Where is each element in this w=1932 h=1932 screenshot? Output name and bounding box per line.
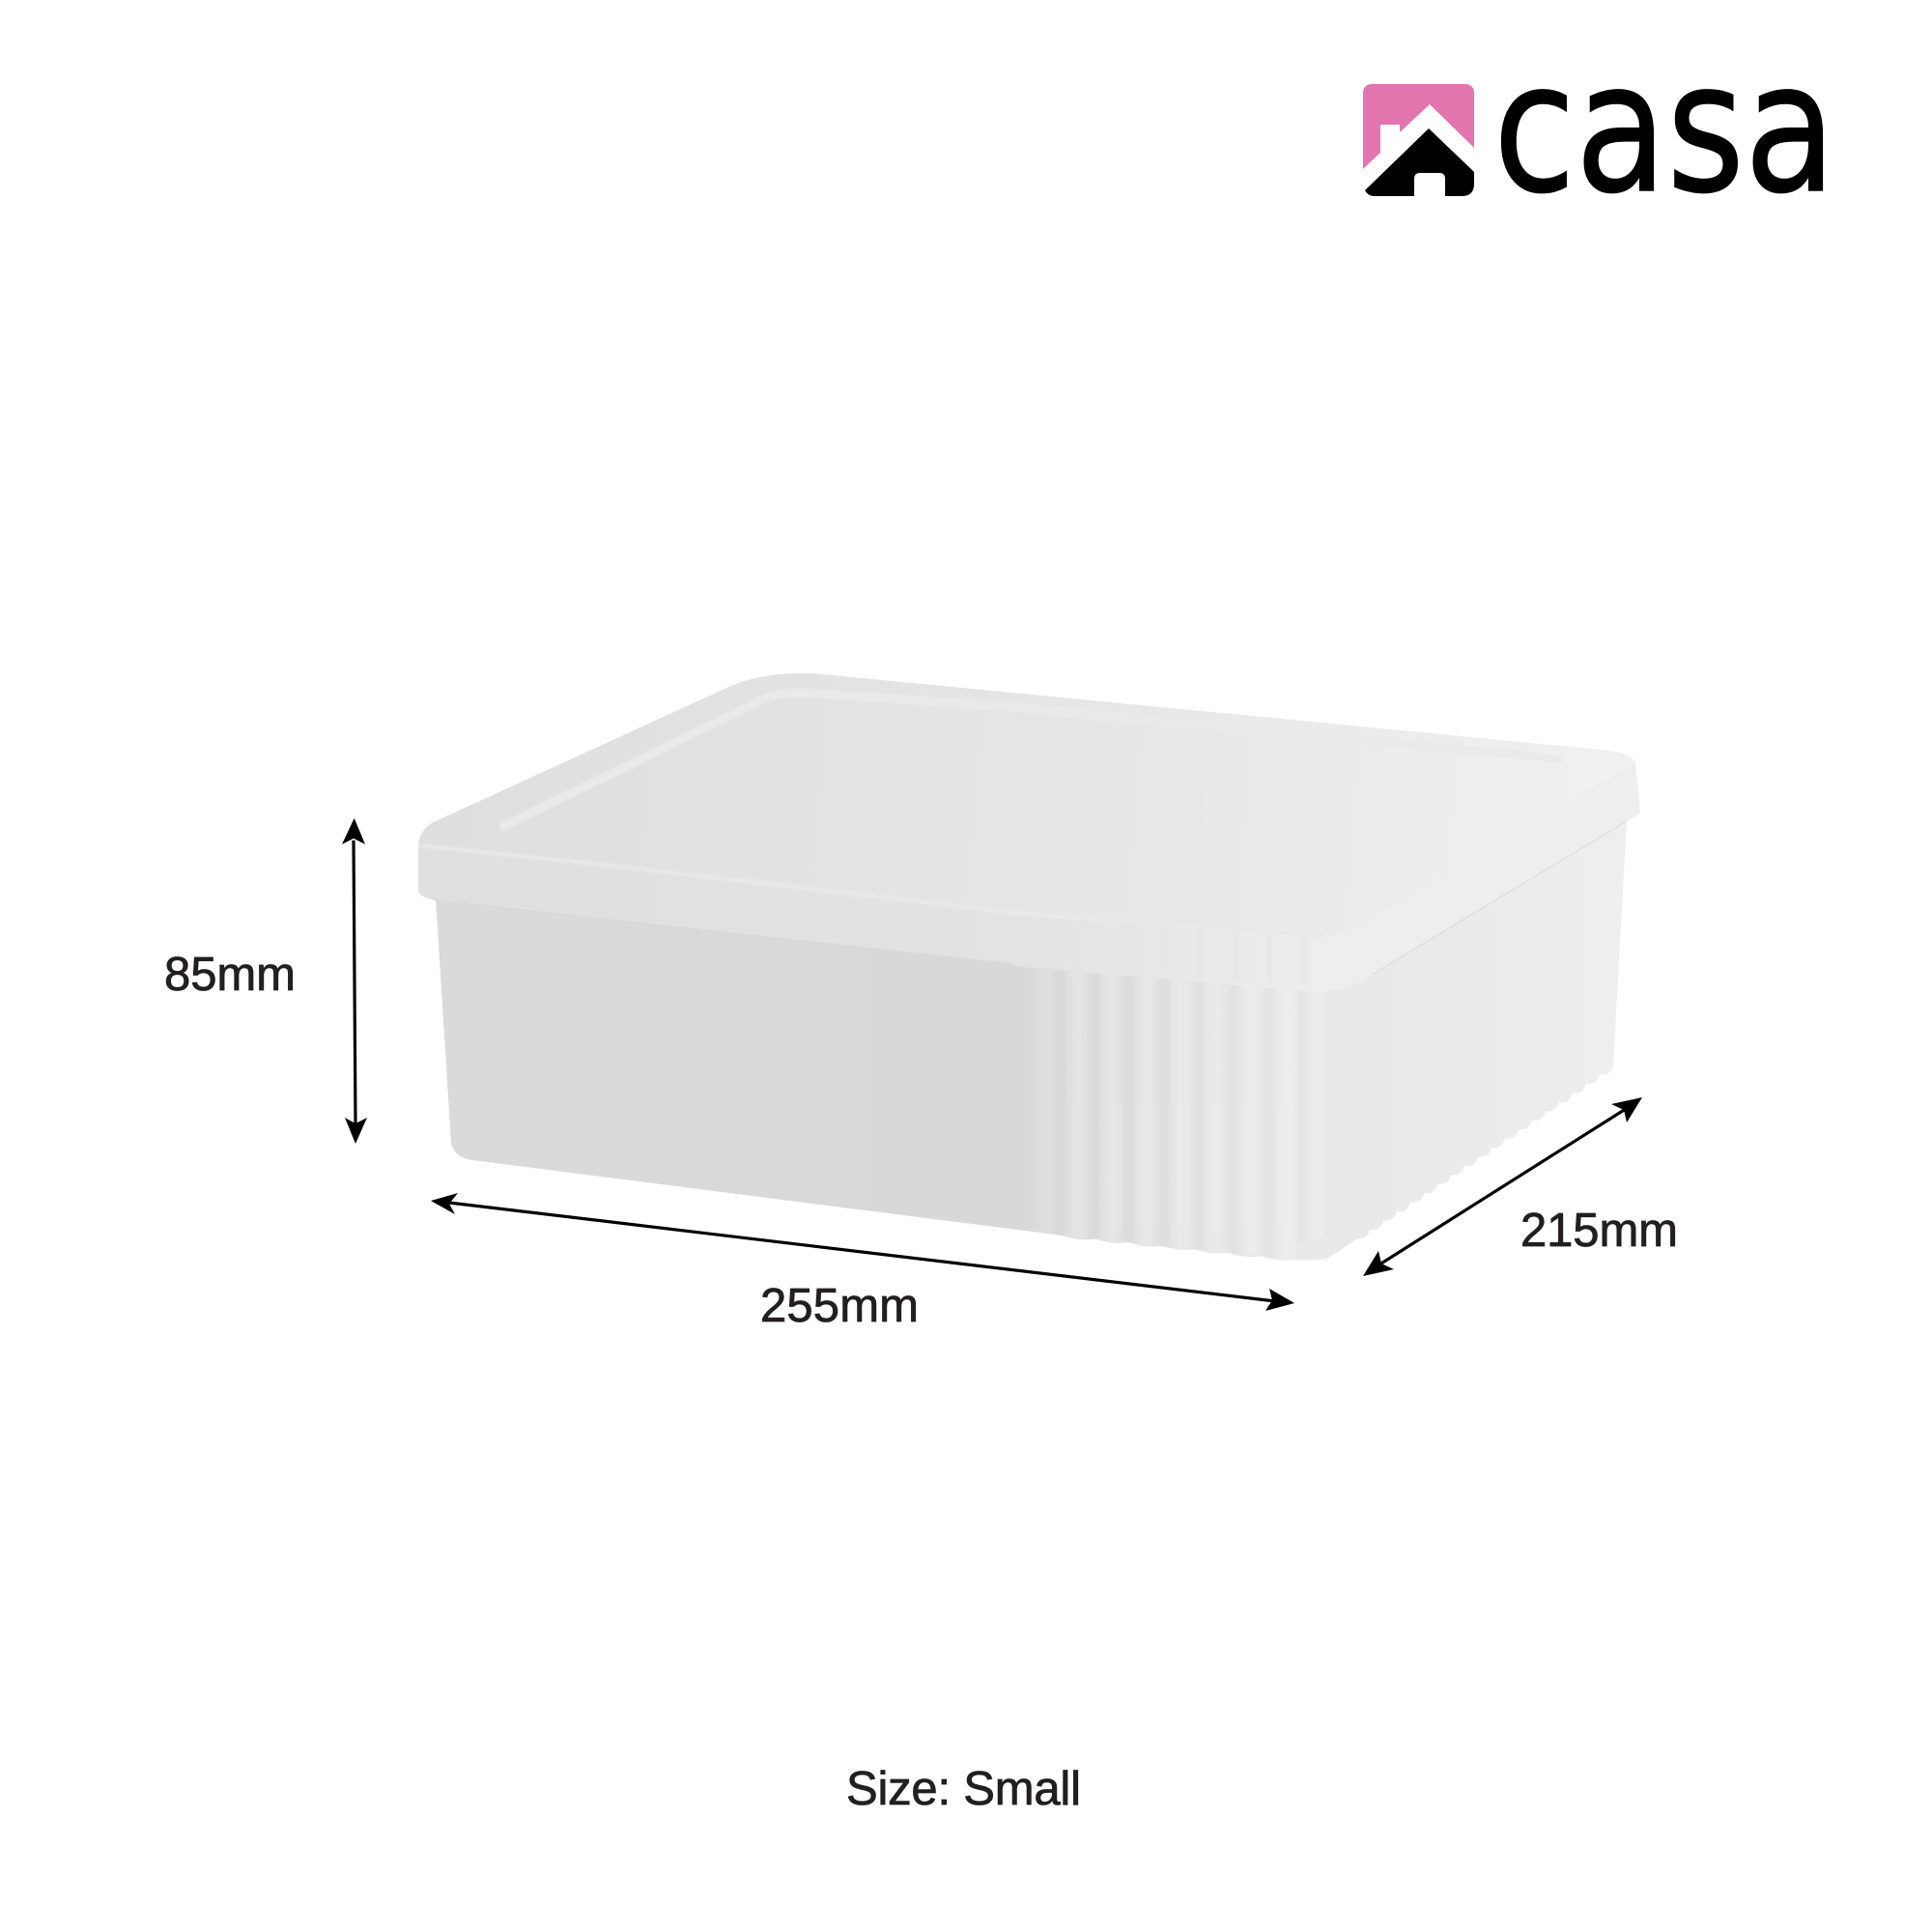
ribs on front wall [1055, 956, 1308, 1265]
arrow: depth [1363, 1097, 1642, 1276]
caption: size: Size: Small [846, 1763, 1081, 1815]
product: white storage box [418, 673, 1640, 1265]
lid top face [418, 673, 1635, 936]
icon: pink square with house [1363, 84, 1474, 196]
lid ribs [1058, 920, 1308, 986]
box body: front wall [436, 898, 1324, 1261]
wordmark: casa: casa [1493, 24, 1835, 234]
label: height: 85mm [164, 949, 296, 1001]
lid right band [1333, 763, 1640, 991]
lid front edge highlight [418, 845, 1324, 936]
lid silhouette and front band [418, 673, 1640, 992]
lid shadow line [435, 821, 1627, 975]
logo: casa [1363, 24, 1835, 234]
arrow: height [342, 818, 367, 1144]
label: width: 255mm [760, 1280, 919, 1332]
arrow: width [431, 1193, 1294, 1311]
box body: right wall [1324, 819, 1627, 1260]
lid inset rim highlight [500, 693, 1562, 828]
rounded bottom corner [1294, 1236, 1333, 1261]
label: depth: 215mm [1520, 1205, 1678, 1257]
